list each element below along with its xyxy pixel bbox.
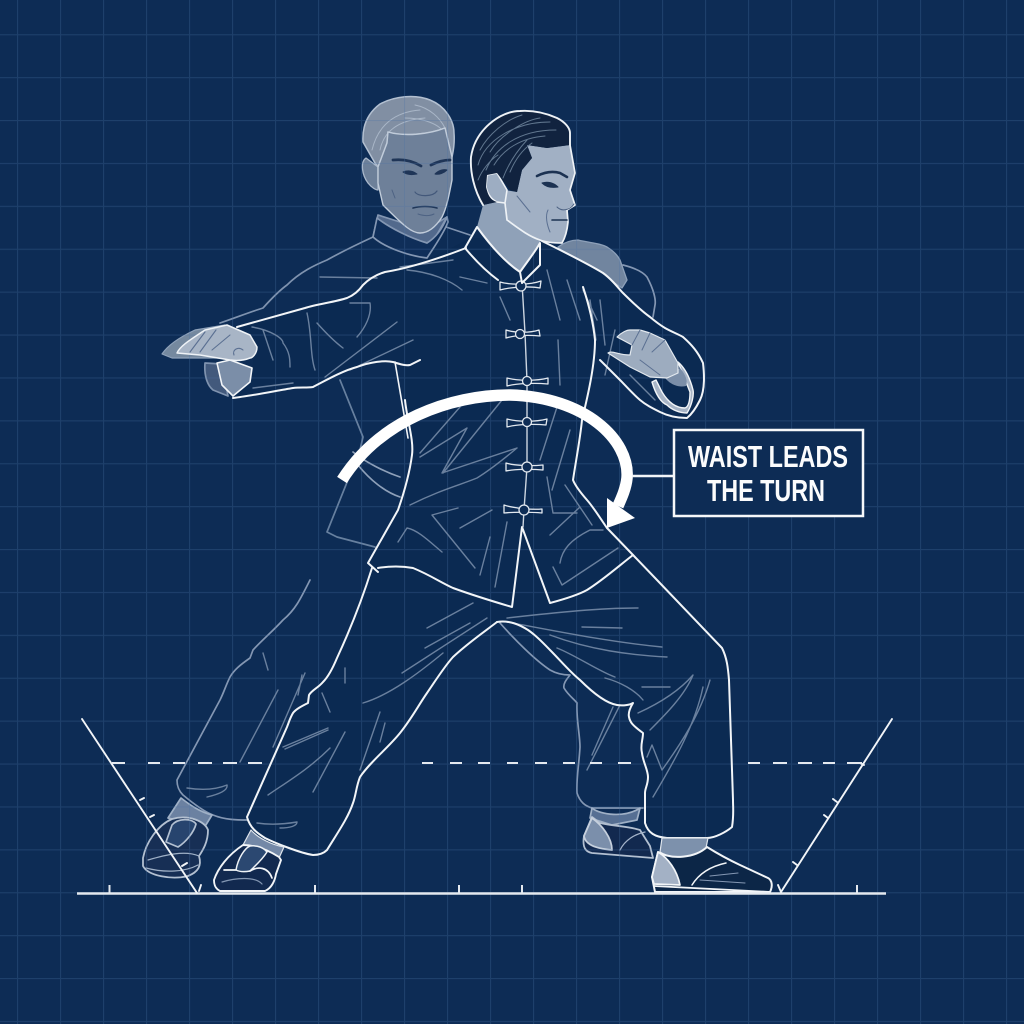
ear bbox=[486, 173, 507, 203]
ghost body side bbox=[327, 380, 375, 547]
ghost left shoe bbox=[143, 798, 212, 878]
placket bbox=[522, 283, 527, 527]
neck bbox=[477, 200, 540, 272]
left cuff bbox=[217, 360, 252, 396]
left shoe bbox=[214, 830, 284, 891]
left angle guide bbox=[82, 719, 201, 893]
face features bbox=[517, 172, 574, 232]
callout: WAIST LEADS bbox=[688, 439, 848, 474]
ghost sash bbox=[353, 452, 400, 497]
callout bbox=[674, 430, 863, 516]
hair outline bbox=[471, 111, 570, 205]
callout: THE TURN bbox=[707, 473, 825, 508]
ghost sleeve outline bbox=[220, 225, 470, 323]
right angle guide bbox=[778, 719, 892, 892]
right hand fingers bbox=[632, 330, 665, 375]
ground line with ticks bbox=[77, 885, 886, 894]
face outline bbox=[505, 145, 575, 243]
face bbox=[505, 145, 575, 243]
right hand shadow bbox=[665, 368, 687, 387]
hair bbox=[471, 111, 570, 205]
ghost hand bbox=[162, 325, 240, 358]
ghost hair strands bbox=[372, 105, 445, 150]
main figure bbox=[177, 111, 772, 892]
rotation arrow bbox=[342, 395, 635, 528]
ghost face bbox=[378, 128, 452, 233]
ghost left leg bbox=[177, 580, 310, 820]
right shoe bbox=[652, 838, 772, 892]
right sleeve bbox=[540, 240, 704, 418]
left sleeve underside bbox=[233, 360, 420, 398]
ghost right leg bbox=[500, 623, 643, 808]
collar bbox=[465, 227, 540, 283]
trousers right leg bbox=[497, 555, 733, 838]
left hand fingers bbox=[190, 330, 243, 355]
fabric folds bbox=[187, 260, 710, 828]
ghost cuff bbox=[205, 363, 228, 396]
jacket hem bbox=[378, 287, 633, 607]
ghost ear bbox=[362, 158, 378, 190]
ghost collar bbox=[373, 217, 448, 258]
dashed height line bbox=[112, 762, 862, 764]
left hand bbox=[177, 325, 257, 360]
sash strokes bbox=[368, 400, 412, 572]
left body side bbox=[395, 362, 408, 438]
right hand bbox=[608, 330, 678, 378]
trousers left leg bbox=[247, 568, 497, 855]
right cuff bbox=[652, 362, 693, 413]
main figure silhouette bbox=[233, 238, 733, 855]
ghost far sleeve bbox=[623, 265, 655, 317]
ghost neck bbox=[373, 215, 447, 252]
left sleeve bbox=[237, 248, 466, 327]
ghost hand on shoulder bbox=[558, 240, 627, 288]
ghost hair bbox=[363, 97, 454, 167]
frog buttons bbox=[500, 281, 548, 515]
ghost figure: starting position bbox=[143, 97, 655, 878]
ghost right shoe bbox=[583, 808, 653, 858]
connector line bbox=[632, 475, 674, 477]
ghost face features bbox=[392, 160, 450, 216]
hair strands bbox=[478, 115, 556, 180]
